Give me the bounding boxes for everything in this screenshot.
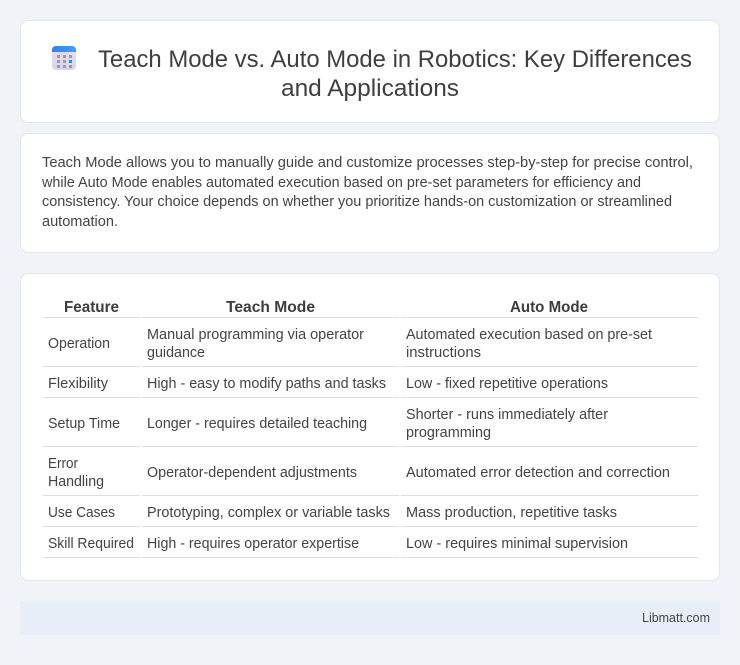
panel: comparison table [20, 274, 720, 580]
row: Operation: Automated execution based on pre-set [406, 327, 652, 343]
row: Flexibility [48, 376, 608, 392]
title [98, 46, 692, 102]
title: Teach Mode vs. Auto Mode in Robotics: Key Differences [98, 46, 692, 73]
row: Flexibility: High - easy to modify paths and tasks [147, 376, 386, 392]
row: Skill Required: Low - requires minimal supervision [406, 536, 628, 552]
panel: title card [20, 20, 720, 122]
row: Operation [48, 327, 652, 361]
row: Use Cases [48, 505, 617, 521]
row: Operation: guidance [147, 345, 205, 361]
row: Error Handling [48, 456, 670, 490]
row: Flexibility: Flexibility [48, 376, 109, 392]
intro text: while Auto Mode enables automated execution based on pre-set parameters for efficiency and [41, 175, 641, 191]
table header [64, 299, 588, 316]
row: Setup Time [48, 407, 608, 441]
row: Use Cases: Prototyping, complex or variable tasks [147, 505, 390, 521]
row: Skill Required [48, 536, 628, 552]
row: Use Cases: Use Cases [48, 505, 115, 521]
row: Use Cases: Mass production, repetitive tasks [406, 505, 617, 521]
table header: Auto Mode [510, 299, 588, 316]
row: Operation: instructions [406, 345, 481, 361]
row: Setup Time: Longer - requires detailed teaching [147, 416, 367, 432]
title: and Applications [281, 75, 459, 102]
row: Setup Time: Setup Time [48, 416, 120, 432]
row: Operation: Operation [48, 336, 110, 352]
panel: introduction [20, 134, 720, 252]
row: Error Handling: Automated error detection and correction [406, 465, 670, 481]
row: Skill Required: Skill Required [48, 536, 134, 552]
table header: Teach Mode [226, 299, 315, 316]
row: Setup Time: Shorter - runs immediately after [406, 407, 608, 423]
footer attribution: Libmatt.com [642, 611, 710, 625]
row: Skill Required: High - requires operator expertise [147, 536, 359, 552]
row: Setup Time: programming [406, 425, 491, 441]
row: Error Handling: Handling [48, 474, 104, 490]
row: Flexibility: Low - fixed repetitive operations [406, 376, 608, 392]
intro text [41, 155, 693, 230]
icon: calendar [52, 46, 76, 70]
row: Error Handling: Operator-dependent adjustments [147, 465, 357, 481]
footer [20, 601, 720, 635]
intro text: automation. [42, 214, 118, 230]
intro text: Teach Mode allows you to manually guide and customize processes step-by-step for precise control, [42, 155, 693, 171]
row: Operation: Manual programming via operator [147, 327, 364, 343]
row: Error Handling: Error [48, 456, 78, 472]
intro text: consistency. Your choice depends on whether you prioritize hands-on customization or streamlined [42, 194, 672, 210]
table header: Feature [64, 299, 119, 316]
